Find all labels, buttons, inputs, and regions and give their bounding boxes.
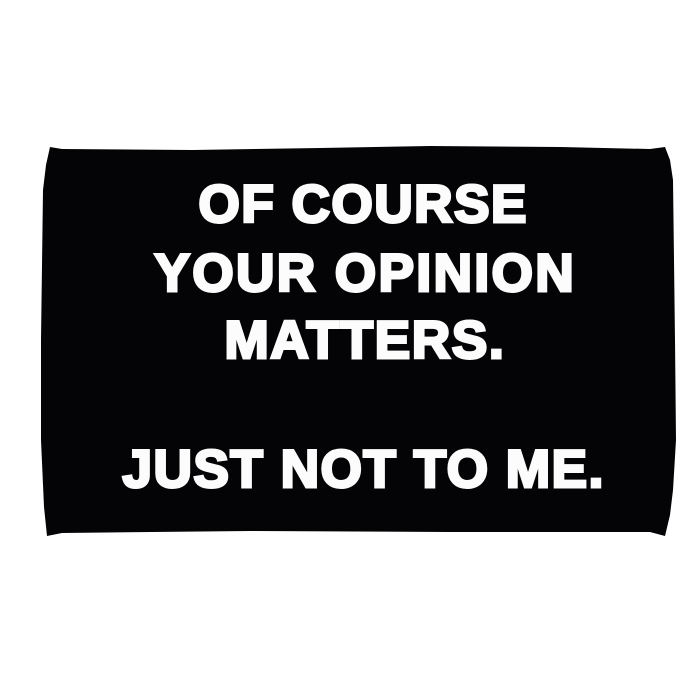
line 4: JUST NOT TO ME.: JUST NOT TO ME.: [122, 440, 605, 499]
line 3: MATTERS.: MATTERS.: [224, 311, 505, 370]
line 1: OF COURSE: OF COURSE: [198, 175, 528, 234]
line 2: YOUR OPINION: YOUR OPINION: [154, 244, 576, 303]
